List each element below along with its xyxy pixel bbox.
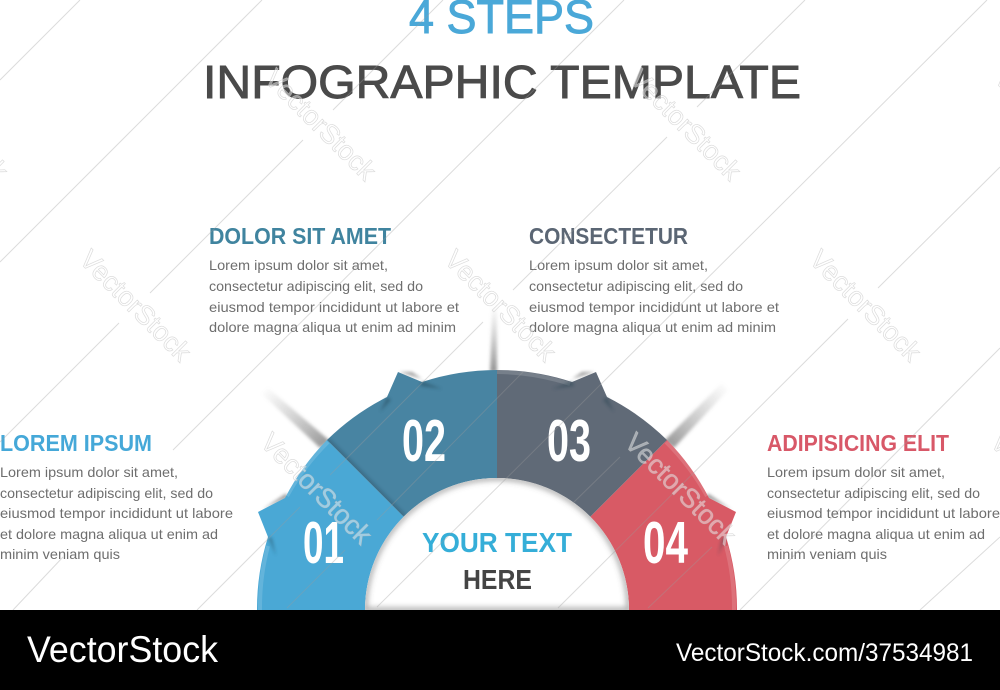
semicircle diagram [257, 305, 737, 610]
body: lorem ipsum: consectetur adipiscing elit, sed do [0, 485, 213, 501]
footer bar [0, 610, 1000, 690]
text block: dolor sit amet [209, 223, 459, 335]
body: dolor sit amet: dolore magna aliqua ut enim ad minim [209, 319, 456, 335]
center circle [365, 478, 629, 610]
inner tab shadows [268, 381, 726, 556]
text block: lorem ipsum [0, 430, 233, 562]
body: consectetur: Lorem ipsum dolor sit amet, [529, 257, 708, 273]
heading: consectetur: CONSECTETUR [529, 223, 688, 249]
body: dolor sit amet [209, 257, 459, 335]
segment 03 [497, 370, 667, 517]
segment 04 [590, 440, 737, 610]
segment divider shadows [327, 438, 406, 516]
segment 02 [327, 370, 497, 517]
segment 01 [257, 440, 404, 610]
number 01: 01 [303, 510, 344, 576]
heading: dolor sit amet: DOLOR SIT AMET [209, 223, 391, 249]
heading: adipisicing elit: ADIPISICING ELIT [767, 430, 949, 456]
shadow: right divider [664, 389, 722, 449]
text block: consectetur [529, 223, 779, 335]
text block: adipisicing elit [767, 430, 1000, 562]
shadow: top divider [490, 305, 497, 372]
body: adipisicing elit: minim veniam quis [767, 546, 887, 562]
heading: lorem ipsum: LOREM IPSUM [0, 430, 152, 456]
watermark text: VectorStock [439, 244, 562, 368]
shadows behind tabs [262, 372, 732, 510]
watermark text: VectorStock [255, 427, 378, 551]
body: dolor sit amet: consectetur adipiscing elit, sed do [209, 278, 423, 294]
watermark text: VectorStock [804, 244, 927, 368]
body: consectetur: eiusmod tempor incididunt ut labore et [529, 299, 779, 315]
body: lorem ipsum: et dolore magna aliqua ut enim ad [0, 526, 218, 542]
body: consectetur: dolore magna aliqua ut enim ad minim [529, 319, 776, 335]
watermark text: VectorStock [624, 63, 747, 187]
watermark text: VectorStock [619, 427, 742, 551]
center inner shadow [365, 478, 629, 610]
title line 2: INFOGRAPHIC TEMPLATE [203, 56, 801, 108]
body: lorem ipsum: eiusmod tempor incididunt ut labore [0, 505, 233, 521]
body: dolor sit amet: eiusmod tempor incididunt ut labore et [209, 299, 459, 315]
body: consectetur: consectetur adipiscing elit, sed do [529, 278, 743, 294]
footer url: VectorStock.com/37534981 [676, 639, 973, 667]
center text: your text: YOUR TEXT [422, 527, 572, 558]
body: consectetur [529, 257, 779, 335]
watermark text: VectorStock [74, 244, 197, 368]
number 03: 03 [547, 408, 591, 474]
number 02: 02 [402, 408, 446, 474]
number 04: 04 [643, 510, 688, 576]
body: adipisicing elit: eiusmod tempor incididunt ut labore [767, 505, 1000, 521]
title [203, 0, 801, 108]
shadow: left divider [268, 394, 330, 449]
body: lorem ipsum [0, 464, 233, 562]
body: lorem ipsum: Lorem ipsum dolor sit amet, [0, 464, 178, 480]
body: adipisicing elit: et dolore magna aliqua ut enim ad [767, 526, 985, 542]
body: dolor sit amet: Lorem ipsum dolor sit amet, [209, 257, 388, 273]
center text: here: HERE [463, 564, 532, 595]
footer brand: VectorStock [27, 629, 218, 670]
body: adipisicing elit: Lorem ipsum dolor sit amet, [767, 464, 945, 480]
watermark text [0, 63, 1000, 551]
body: adipisicing elit [767, 464, 1000, 562]
body: lorem ipsum: minim veniam quis [0, 546, 120, 562]
rim highlight [260, 372, 734, 610]
body: adipisicing elit: consectetur adipiscing elit, sed do [767, 485, 980, 501]
watermark text: VectorStock [259, 63, 382, 187]
